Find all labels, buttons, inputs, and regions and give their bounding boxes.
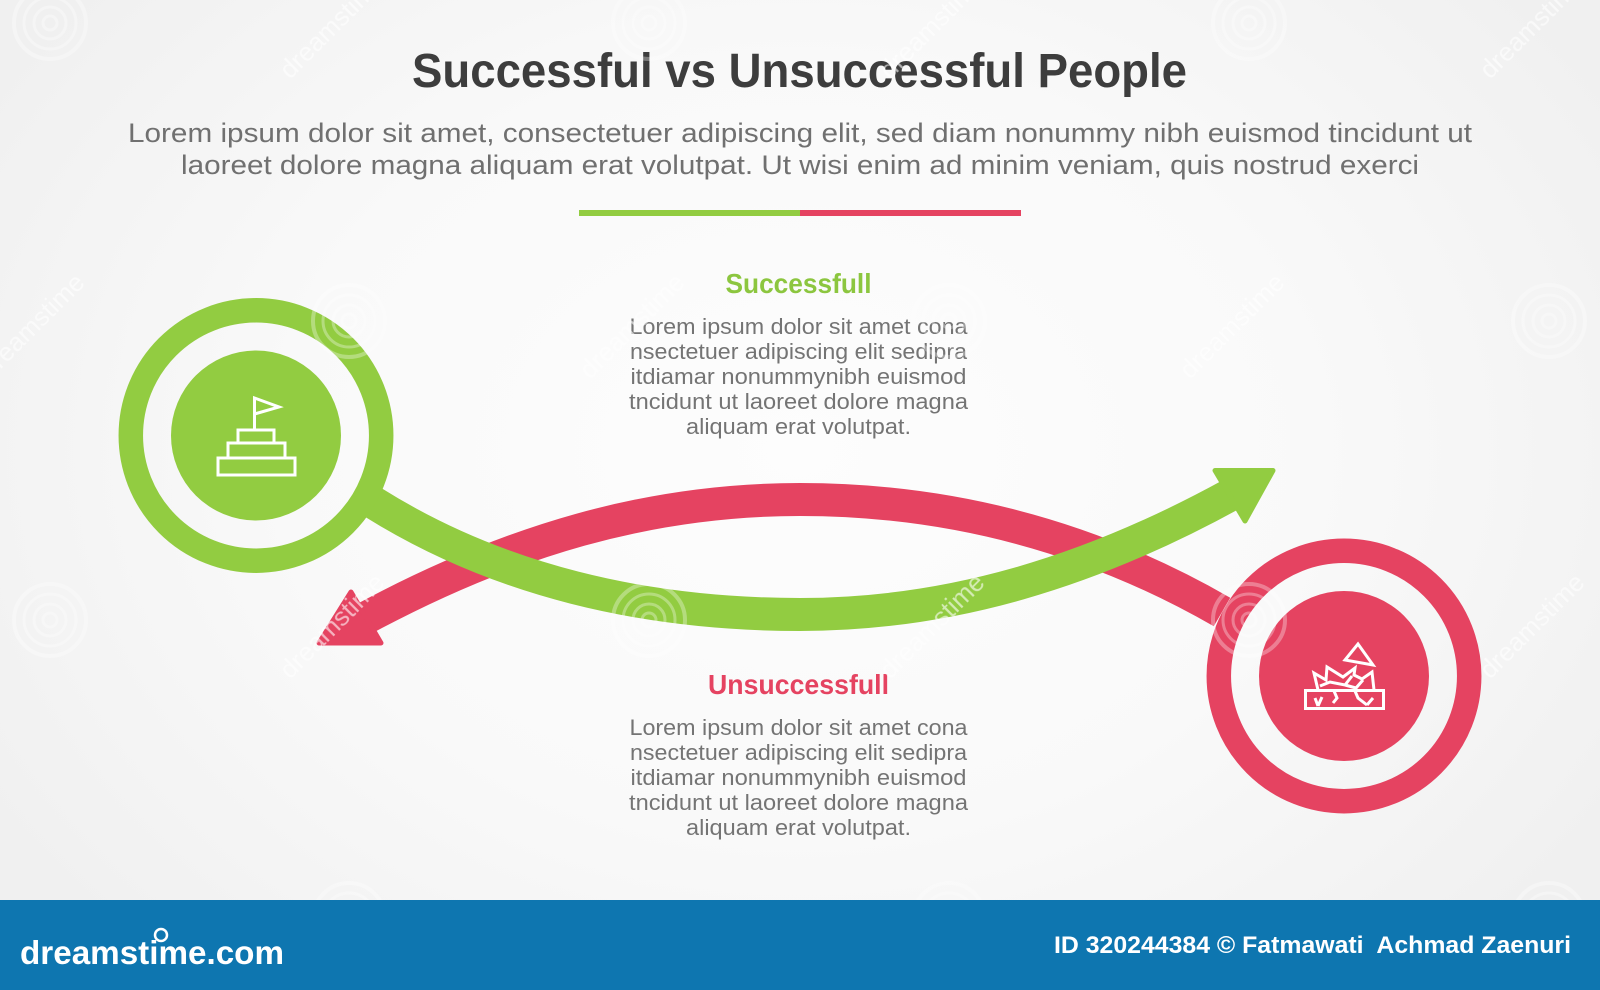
watermark pattern: dreamstime xyxy=(273,567,390,684)
watermark pattern: dreamstime xyxy=(873,567,990,684)
text block: successfull: tncidunt ut laoreet dolore magna xyxy=(629,389,969,414)
watermark pattern: dreamstime xyxy=(1173,267,1290,384)
icon: collapsed podium with broken flag xyxy=(1306,644,1384,708)
subtitle text: Lorem ipsum dolor sit amet, consectetuer adipiscing elit, sed diam nonummy nibh euismod tincidunt ut xyxy=(128,118,1473,148)
text block: unsuccessfull: Lorem ipsum dolor sit amet cona xyxy=(630,715,968,740)
text block: successfull xyxy=(629,314,969,439)
text block: successfull: Lorem ipsum dolor sit amet cona xyxy=(630,314,968,339)
text block: unsuccessfull: nsectetuer adipiscing elit sedipra xyxy=(630,740,968,765)
text block: unsuccessfull: tncidunt ut laoreet dolore magna xyxy=(629,790,969,815)
subtitle text xyxy=(128,118,1473,180)
text block: unsuccessfull: aliquam erat volutpat. xyxy=(686,815,911,840)
footer bar xyxy=(0,900,1600,990)
panel: unsuccessful circle xyxy=(1219,551,1469,801)
icon: stepped podium with flag xyxy=(218,398,295,475)
text block: unsuccessfull xyxy=(629,715,969,840)
heading: unsuccessfull: Unsuccessfull xyxy=(708,669,889,700)
heading: successfull: Successfull xyxy=(726,268,872,299)
arrow: red curve to lower left xyxy=(319,500,1222,643)
text block: unsuccessfull: itdiamar nonummynibh euismod xyxy=(630,765,966,790)
footer logo: dreamstime.com xyxy=(20,934,284,971)
text block: successfull: nsectetuer adipiscing elit sedipra xyxy=(630,339,968,364)
footer credit: ID 320244384 © Fatmawati Achmad Zaenuri xyxy=(1054,932,1571,959)
arrow: green curve to upper right xyxy=(360,470,1273,614)
text block: successfull: aliquam erat volutpat. xyxy=(686,414,911,439)
watermark pattern: dreamstime xyxy=(573,267,690,384)
title: Successful vs Unsuccessful People xyxy=(412,45,1187,98)
panel: successful circle xyxy=(131,310,381,561)
divider bar xyxy=(579,210,1021,216)
watermark pattern: dreamstime xyxy=(1473,567,1590,684)
text block: successfull: itdiamar nonummynibh euismod xyxy=(630,364,966,389)
subtitle text: laoreet dolore magna aliquam erat volutpat. Ut wisi enim ad minim veniam, quis nostrud exerci xyxy=(181,150,1419,180)
